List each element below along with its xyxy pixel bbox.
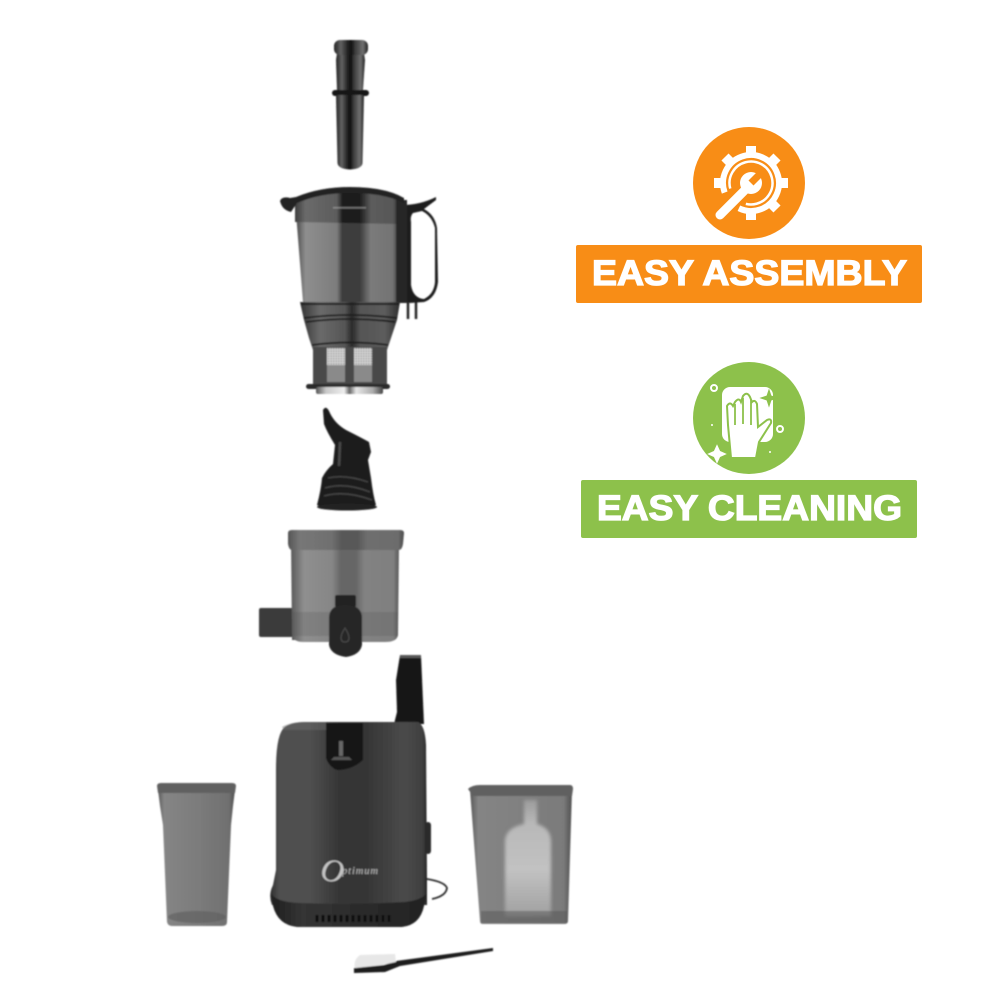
logo xyxy=(319,851,379,890)
base unit xyxy=(270,655,447,927)
top chute xyxy=(394,655,424,724)
right pitcher xyxy=(468,785,573,924)
jug body xyxy=(295,190,400,302)
icon: gear and wrench xyxy=(693,127,805,239)
power cord xyxy=(427,879,447,899)
bowl body xyxy=(291,540,399,642)
juice bowl xyxy=(259,530,404,657)
vents xyxy=(317,915,389,922)
strainer flange xyxy=(306,384,390,389)
logo: O xyxy=(319,851,346,890)
badge: easy assembly xyxy=(576,127,922,303)
upper jug with strainer xyxy=(280,187,438,394)
jug neck xyxy=(300,302,400,350)
left cup xyxy=(157,783,236,926)
plunger xyxy=(332,40,369,170)
logo: ptimum xyxy=(341,866,379,877)
motor body xyxy=(270,722,427,905)
feed socket xyxy=(326,723,363,770)
cleaning brush xyxy=(354,948,493,973)
jug handle xyxy=(402,197,438,319)
base foot xyxy=(271,893,427,927)
icon: hand wiping xyxy=(693,362,805,474)
auger xyxy=(317,408,377,510)
steel strainer xyxy=(313,347,387,388)
badge: easy cleaning xyxy=(581,362,917,538)
label banner xyxy=(581,480,917,538)
jug rim and spout xyxy=(280,187,404,212)
bowl juice tab xyxy=(329,595,362,657)
label text: EASY CLEANING xyxy=(597,489,902,528)
bowl side outlet xyxy=(259,608,298,640)
label text: EASY ASSEMBLY xyxy=(592,254,907,293)
bottle inside pitcher xyxy=(505,800,551,916)
label banner xyxy=(576,245,922,303)
